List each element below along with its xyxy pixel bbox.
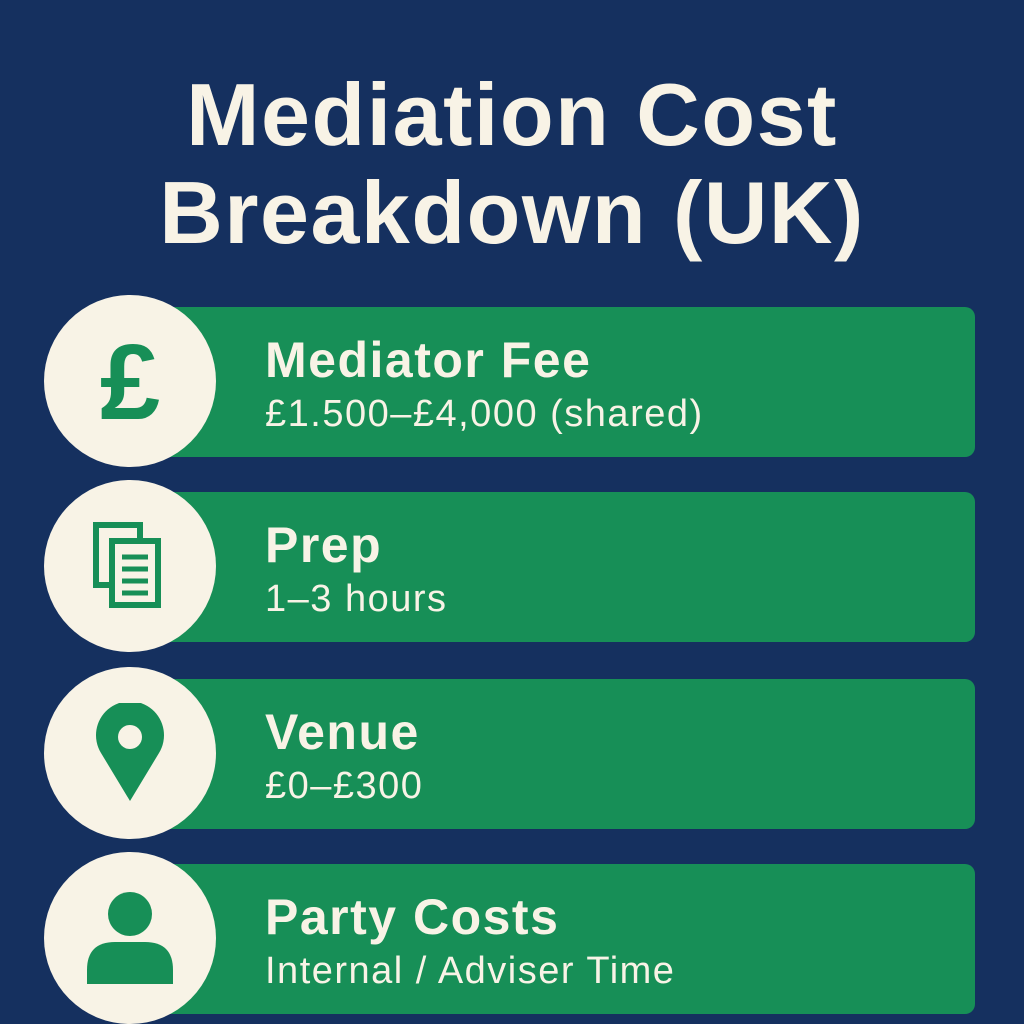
icon: pound xyxy=(44,295,216,467)
heading: venue: Venue xyxy=(265,704,420,760)
panel: party costs xyxy=(44,852,975,1024)
heading: prep: Prep xyxy=(265,517,382,573)
text: fee: £1.500–£4,000 (shared) xyxy=(265,393,704,435)
title: Mediation Cost xyxy=(186,65,838,164)
title xyxy=(159,65,865,262)
icon: person xyxy=(44,852,216,1024)
panel: mediator fee xyxy=(44,295,975,467)
text: internal: Internal / Adviser Time xyxy=(265,950,675,992)
text: hours: 1–3 hours xyxy=(265,578,448,620)
title: Breakdown (UK) xyxy=(159,163,865,262)
icon: pound: £ xyxy=(100,320,160,442)
icon: location pin xyxy=(44,667,216,839)
text: venue cost: £0–£300 xyxy=(265,765,423,807)
heading: party costs: Party Costs xyxy=(265,889,559,945)
heading: mediator fee: Mediator Fee xyxy=(265,332,591,388)
panel: venue xyxy=(44,667,975,839)
panel: prep xyxy=(44,480,975,652)
icon: documents xyxy=(44,480,216,652)
